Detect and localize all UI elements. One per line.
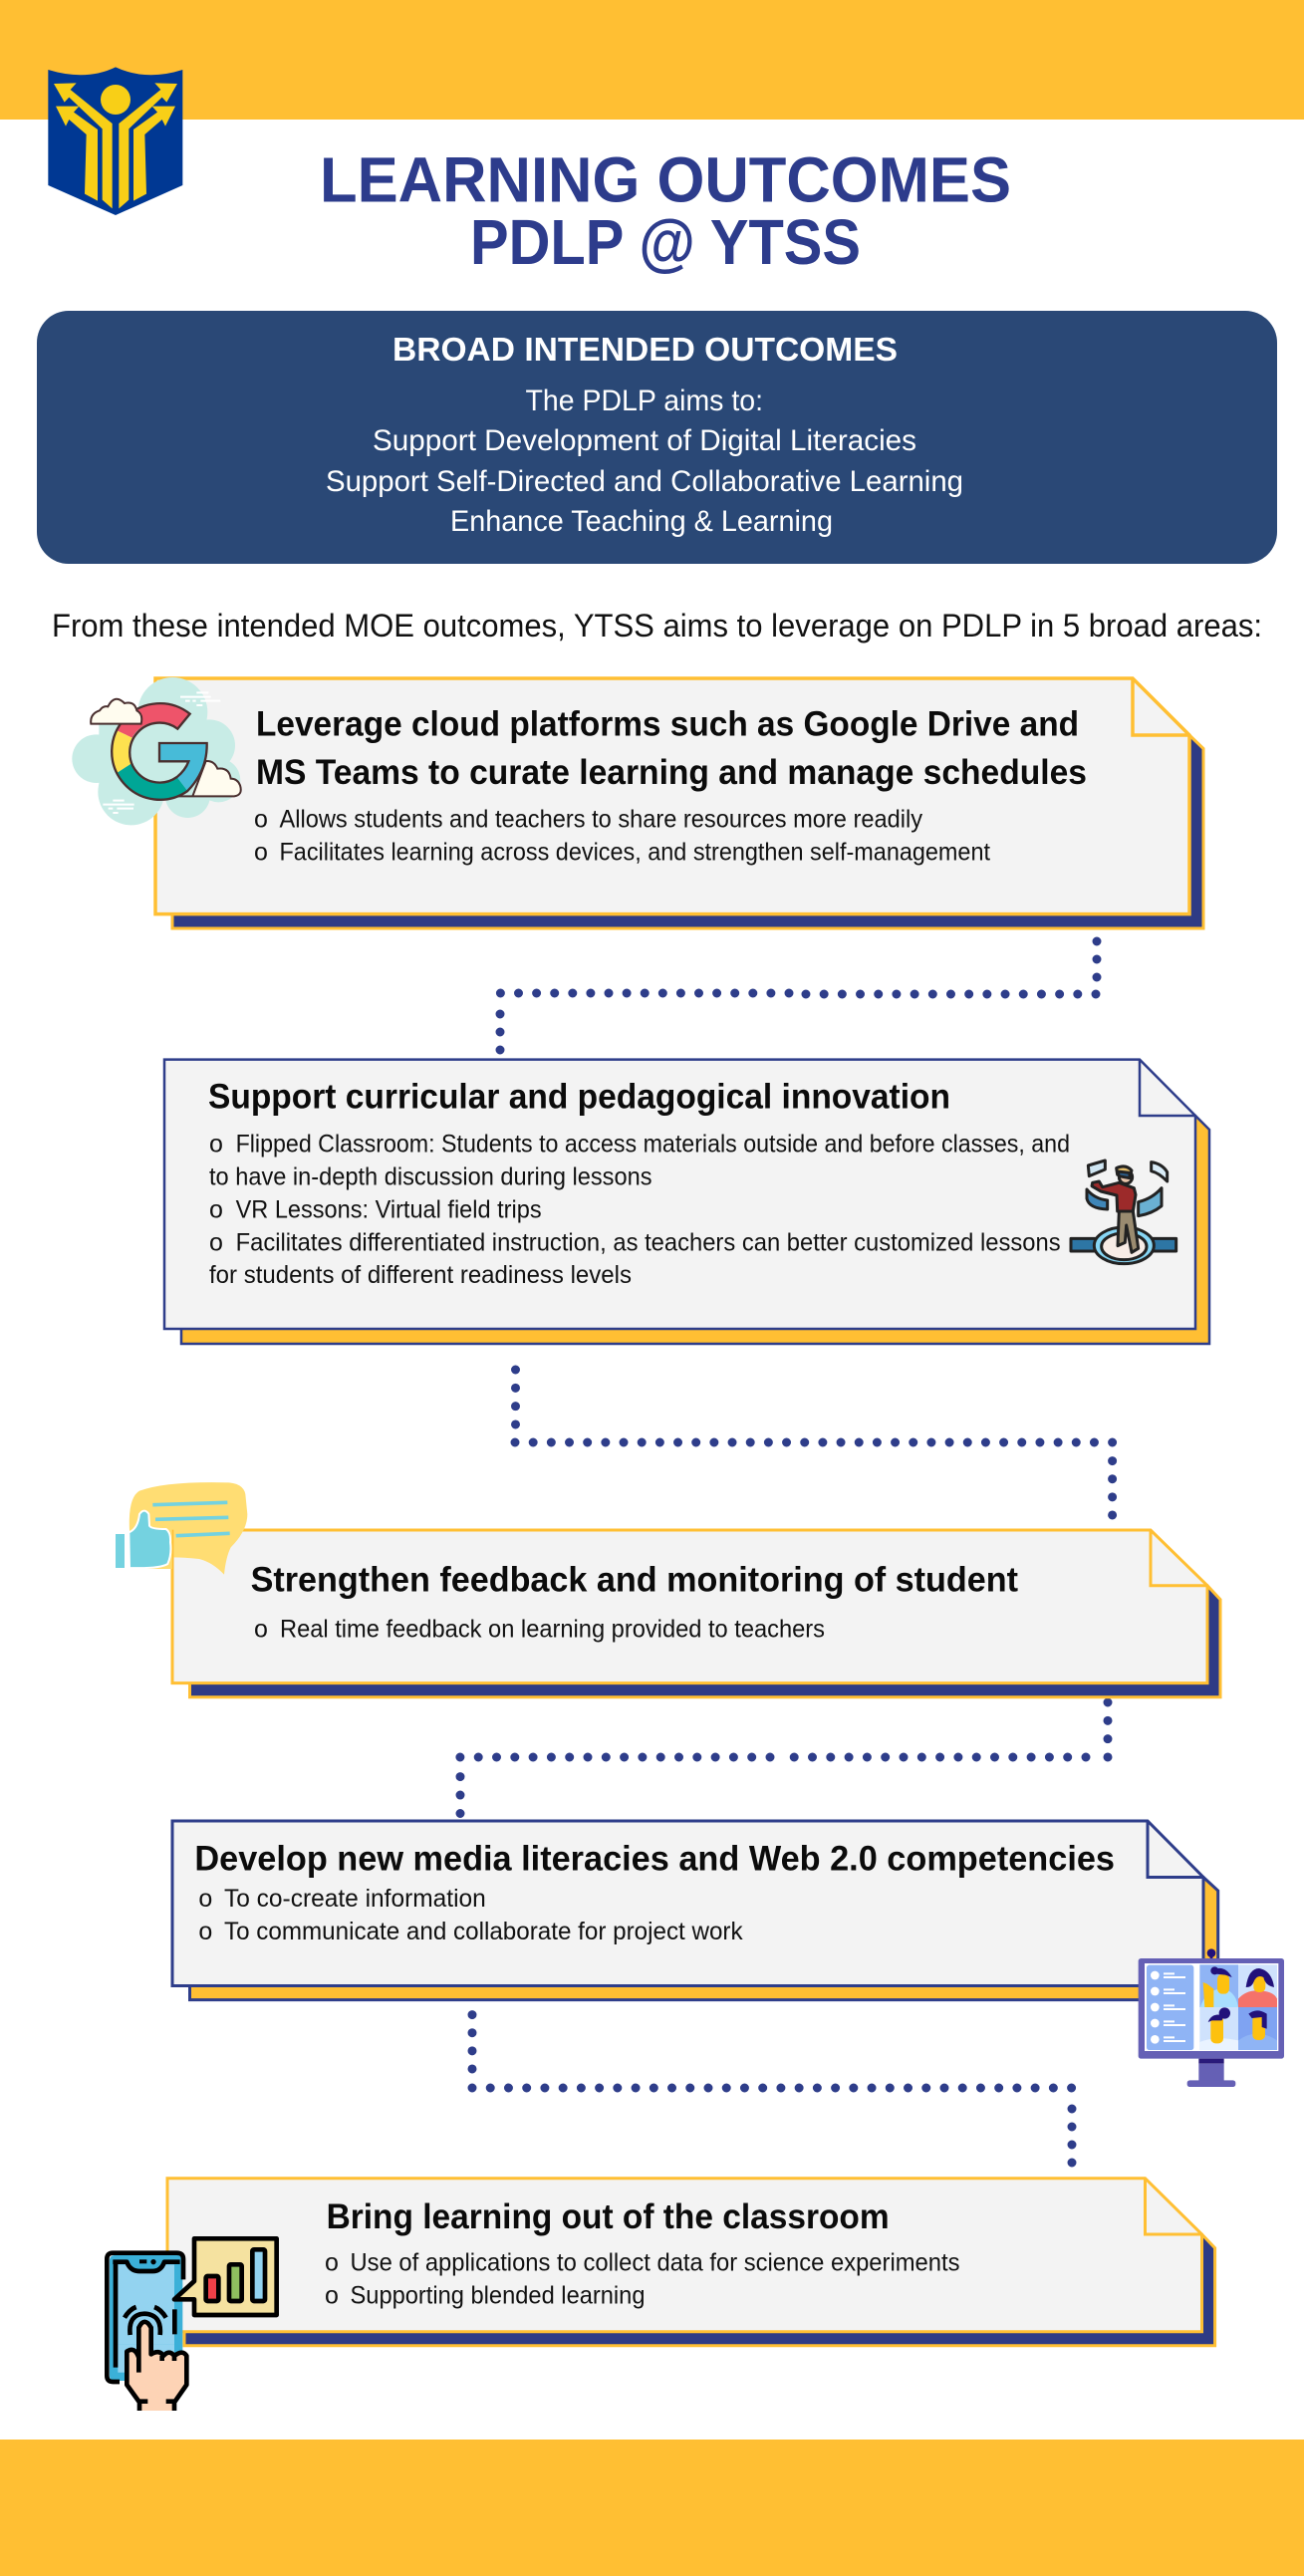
icon: phone with chart and hand: [107, 2238, 277, 2411]
panel: broad intended outcomes: [37, 311, 1277, 564]
card bullets: o: [209, 1229, 223, 1257]
card bullets: o: [325, 2282, 339, 2310]
icon: virtual reality user: [1071, 1160, 1176, 1264]
card bullets: Supporting blended learning: [351, 2282, 646, 2310]
icon: thumbs up speech bubble: [116, 1482, 247, 1594]
card heading: Strengthen feedback and monitoring of student: [251, 1560, 1018, 1600]
panel text lines: [326, 385, 963, 538]
panel heading: BROAD INTENDED OUTCOMES: [392, 331, 898, 368]
panel text lines: Support Self-Directed and Collaborative Learning: [326, 465, 963, 498]
icon: school crest logo: [48, 67, 182, 215]
panel text lines: Enhance Teaching & Learning: [450, 505, 833, 538]
dotted connector 4: [472, 2015, 1072, 2163]
panel: media literacies card: [172, 1821, 1218, 2000]
card bullets: VR Lessons: Virtual field trips: [236, 1195, 542, 1223]
card bullets: To communicate and collaborate for project work: [224, 1918, 743, 1945]
card bullets: o: [209, 1195, 223, 1223]
card bullets: Allows students and teachers to share resources more readily: [279, 805, 922, 833]
panel text lines: Support Development of Digital Literacies: [373, 424, 916, 457]
bottom banner: [0, 2440, 1304, 2576]
title: [320, 143, 1011, 278]
card bullets: o: [198, 1918, 212, 1945]
card heading: Support curricular and pedagogical innovation: [208, 1078, 950, 1117]
card heading: Bring learning out of the classroom: [327, 2197, 890, 2236]
card heading: Develop new media literacies and Web 2.0 competencies: [194, 1840, 1115, 1879]
card heading: MS Teams to curate learning and manage schedules: [256, 753, 1087, 792]
panel: feedback and monitoring card: [172, 1530, 1220, 1697]
title: PDLP @ YTSS: [470, 206, 861, 278]
card bullets: o: [198, 1885, 212, 1913]
card bullets: [209, 1130, 1070, 1289]
card bullets: [325, 2249, 960, 2310]
card bullets: o: [254, 805, 268, 833]
top banner: [0, 0, 1304, 120]
card bullets: o: [254, 839, 268, 867]
dotted connector 2: [515, 1370, 1113, 1515]
card heading: [256, 705, 1087, 792]
card bullets: to have in-depth discussion during lessons: [209, 1163, 652, 1191]
card bullets: for students of different readiness levels: [209, 1261, 632, 1289]
dotted connector 3: [460, 1702, 1108, 1814]
title: LEARNING OUTCOMES: [320, 143, 1011, 215]
dotted connector 1: [500, 941, 1097, 1050]
panel: cloud platforms card: [155, 678, 1203, 928]
panel text lines: The PDLP aims to:: [526, 385, 763, 417]
card bullets: Use of applications to collect data for science experiments: [351, 2249, 960, 2277]
intro sentence: From these intended MOE outcomes, YTSS aims to leverage on PDLP in 5 broad areas:: [52, 608, 1262, 644]
icon: video call monitor: [1139, 1948, 1284, 2087]
card heading: Leverage cloud platforms such as Google Drive and: [256, 705, 1079, 744]
card bullets: To co-create information: [224, 1885, 486, 1913]
card bullets: Facilitates learning across devices, and strengthen self-management: [279, 839, 990, 867]
icon: google cloud: [72, 677, 241, 825]
card bullets: [198, 1885, 743, 1945]
panel: beyond the classroom card: [167, 2179, 1215, 2346]
card bullet: o: [254, 1616, 268, 1644]
card bullet: Real time feedback on learning provided to teachers: [280, 1616, 825, 1644]
card bullets: [254, 805, 990, 867]
panel: curricular innovation card: [164, 1060, 1209, 1344]
card bullets: Flipped Classroom: Students to access materials outside and before classes, and: [236, 1130, 1070, 1158]
card bullets: Facilitates differentiated instruction, as teachers can better customized lessons: [236, 1229, 1061, 1257]
card bullets: o: [325, 2249, 339, 2277]
card bullets: o: [209, 1130, 223, 1158]
